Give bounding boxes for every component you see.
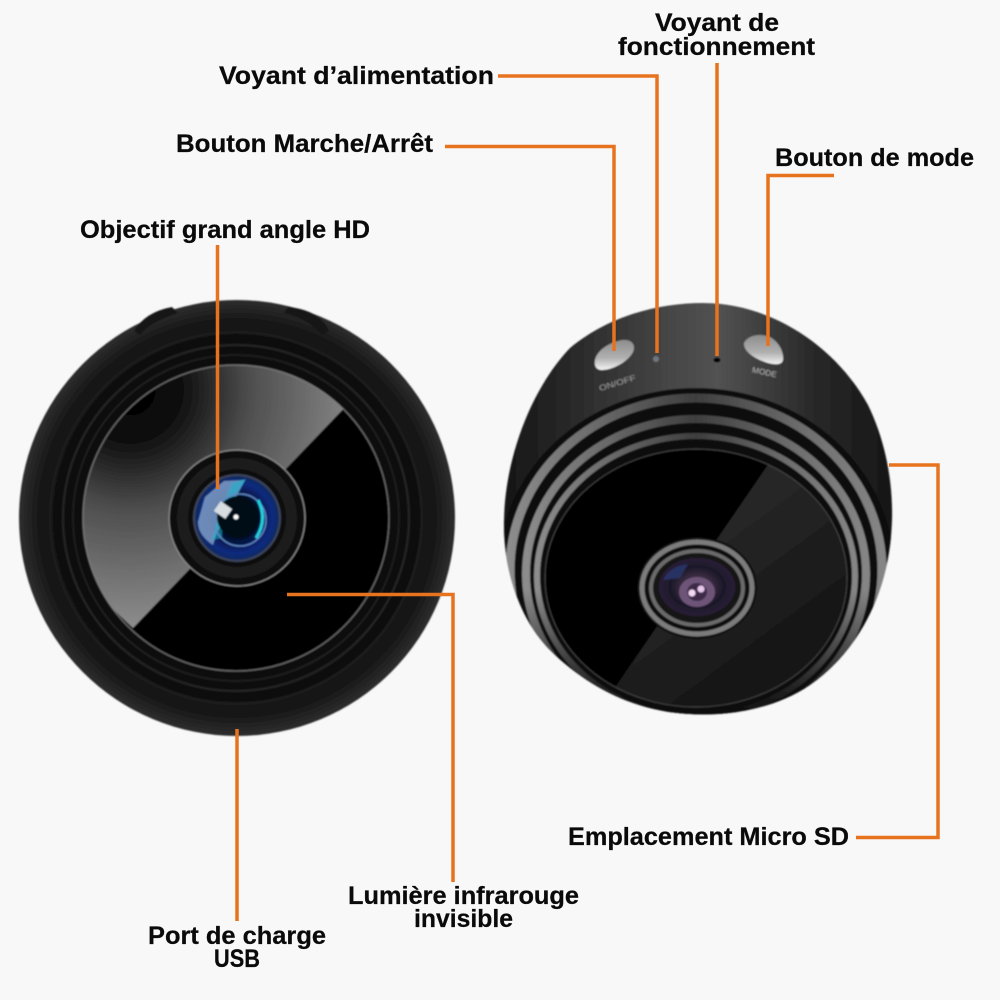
lens: [169, 450, 305, 586]
on/off label: ON/OFF: [598, 373, 637, 393]
callout: infrared light: invisible: [414, 905, 513, 933]
on/off button: [595, 340, 637, 393]
lens: [637, 537, 757, 639]
callout: USB charging port: USB: [214, 945, 260, 973]
callout: USB charging port: [148, 729, 326, 973]
callout: micro SD slot: [568, 465, 938, 851]
callout: status indicator: [618, 9, 816, 356]
camera body: [504, 303, 892, 714]
callout: on/off button: Bouton Marche/Arrêt: [176, 130, 434, 158]
callout: wide-angle lens: Objectif grand angle HD: [80, 216, 370, 244]
callout: USB charging port: Port de charge: [148, 922, 326, 950]
callout: on/off button: [176, 130, 614, 351]
top mounting bumps: [134, 307, 329, 335]
mode label: MODE: [751, 365, 778, 379]
front glass: [82, 364, 388, 670]
callout: infrared light: Lumière infrarouge: [348, 882, 579, 910]
callout: infrared light: [287, 594, 579, 933]
metal rings: [504, 388, 892, 716]
callout: status indicator: Voyant de: [655, 9, 779, 37]
callout: mode button: Bouton de mode: [775, 144, 974, 172]
status indicator hole: [714, 358, 720, 362]
power indicator: [653, 356, 659, 362]
callout: power indicator: [219, 62, 657, 353]
mode button: [744, 335, 783, 379]
callout: status indicator: fonctionnement: [618, 33, 816, 61]
concentric body rings: [50, 332, 422, 704]
callout: micro SD slot: Emplacement Micro SD: [568, 823, 849, 851]
callout: power indicator: Voyant d’alimentation: [219, 62, 494, 90]
front glass: [546, 450, 846, 706]
camera body: [19, 300, 455, 736]
callout: mode button: [768, 144, 974, 346]
left camera, front view: [19, 300, 455, 736]
right camera, angled view: [502, 302, 894, 716]
